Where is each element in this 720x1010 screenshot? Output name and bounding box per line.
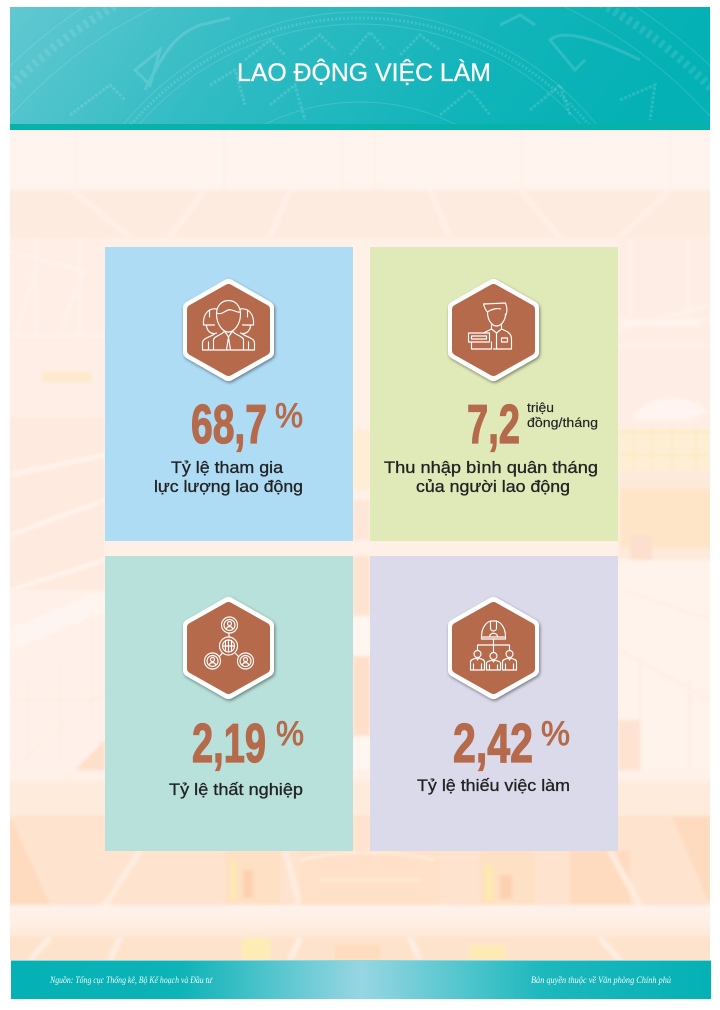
label: Tỷ lệ tham gia [171, 459, 284, 477]
value: 2,19 %: % [276, 715, 304, 753]
panel: labour participation [105, 247, 353, 541]
icon: hexagon with cashier [455, 286, 532, 374]
label [384, 459, 598, 496]
label: Tỷ lệ thiếu việc làm [417, 777, 570, 795]
panel: underemployment [370, 556, 618, 851]
panel: unemployment [105, 556, 353, 851]
label: Tỷ lệ thất nghiệp [169, 781, 303, 799]
icon: hexagon with workers [190, 286, 267, 374]
value: 2,42 %: % [541, 715, 570, 753]
value: 2,42 %: 2,42 [453, 712, 533, 774]
source text: Nguồn: Tổng cục Thống kê, Bộ Kế hoạch và Đầu tư [49, 975, 213, 985]
footer band [11, 960, 711, 999]
value: 68,7 %: 68,7 [191, 393, 267, 455]
label: của người lao động [416, 478, 570, 496]
value: 2,19 %: 2,19 [192, 712, 266, 774]
value: 7,2 trieu dong/thang: 7,2 [467, 393, 520, 455]
value: 7,2 trieu dong/thang: đồng/tháng [527, 415, 598, 430]
icon: hexagon with network [190, 604, 267, 692]
copyright text: Bản quyền thuộc về Văn phòng Chính phủ [531, 975, 671, 986]
label: lực lượng lao động [154, 478, 303, 496]
title: LAO ĐỘNG VIỆC LÀM [237, 58, 491, 87]
value: 68,7 %: % [275, 397, 303, 435]
icon: hexagon with hierarchy [455, 604, 532, 692]
label: Thu nhập bình quân tháng [384, 459, 598, 477]
label [154, 459, 303, 496]
value: 7,2 trieu dong/thang: triệu [527, 400, 554, 415]
panel: average income [370, 247, 618, 541]
value: 7,2 trieu dong/thang [467, 393, 598, 455]
